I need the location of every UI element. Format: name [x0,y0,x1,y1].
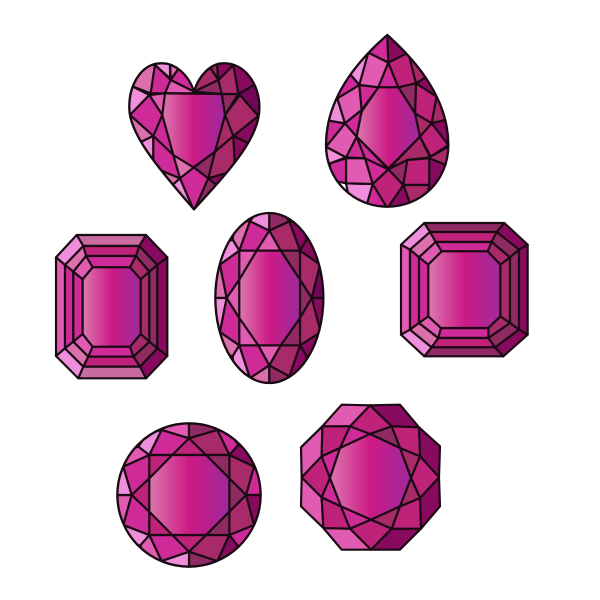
round table facet [149,455,229,535]
gem: heart cut [128,62,260,211]
oval table facet [239,251,300,345]
gem: asscher cut [401,223,528,356]
asscher table facet [428,251,500,328]
gem: pear cut [320,35,455,212]
pear table facet [357,87,420,168]
octagon table facet [330,434,411,520]
heart table facet [162,93,225,167]
emerald table facet [83,267,141,347]
gem: emerald cut [56,235,167,378]
gem: oval cut [214,212,324,384]
gem: round brilliant cut [116,422,262,568]
gem: octagon cut [301,405,440,550]
